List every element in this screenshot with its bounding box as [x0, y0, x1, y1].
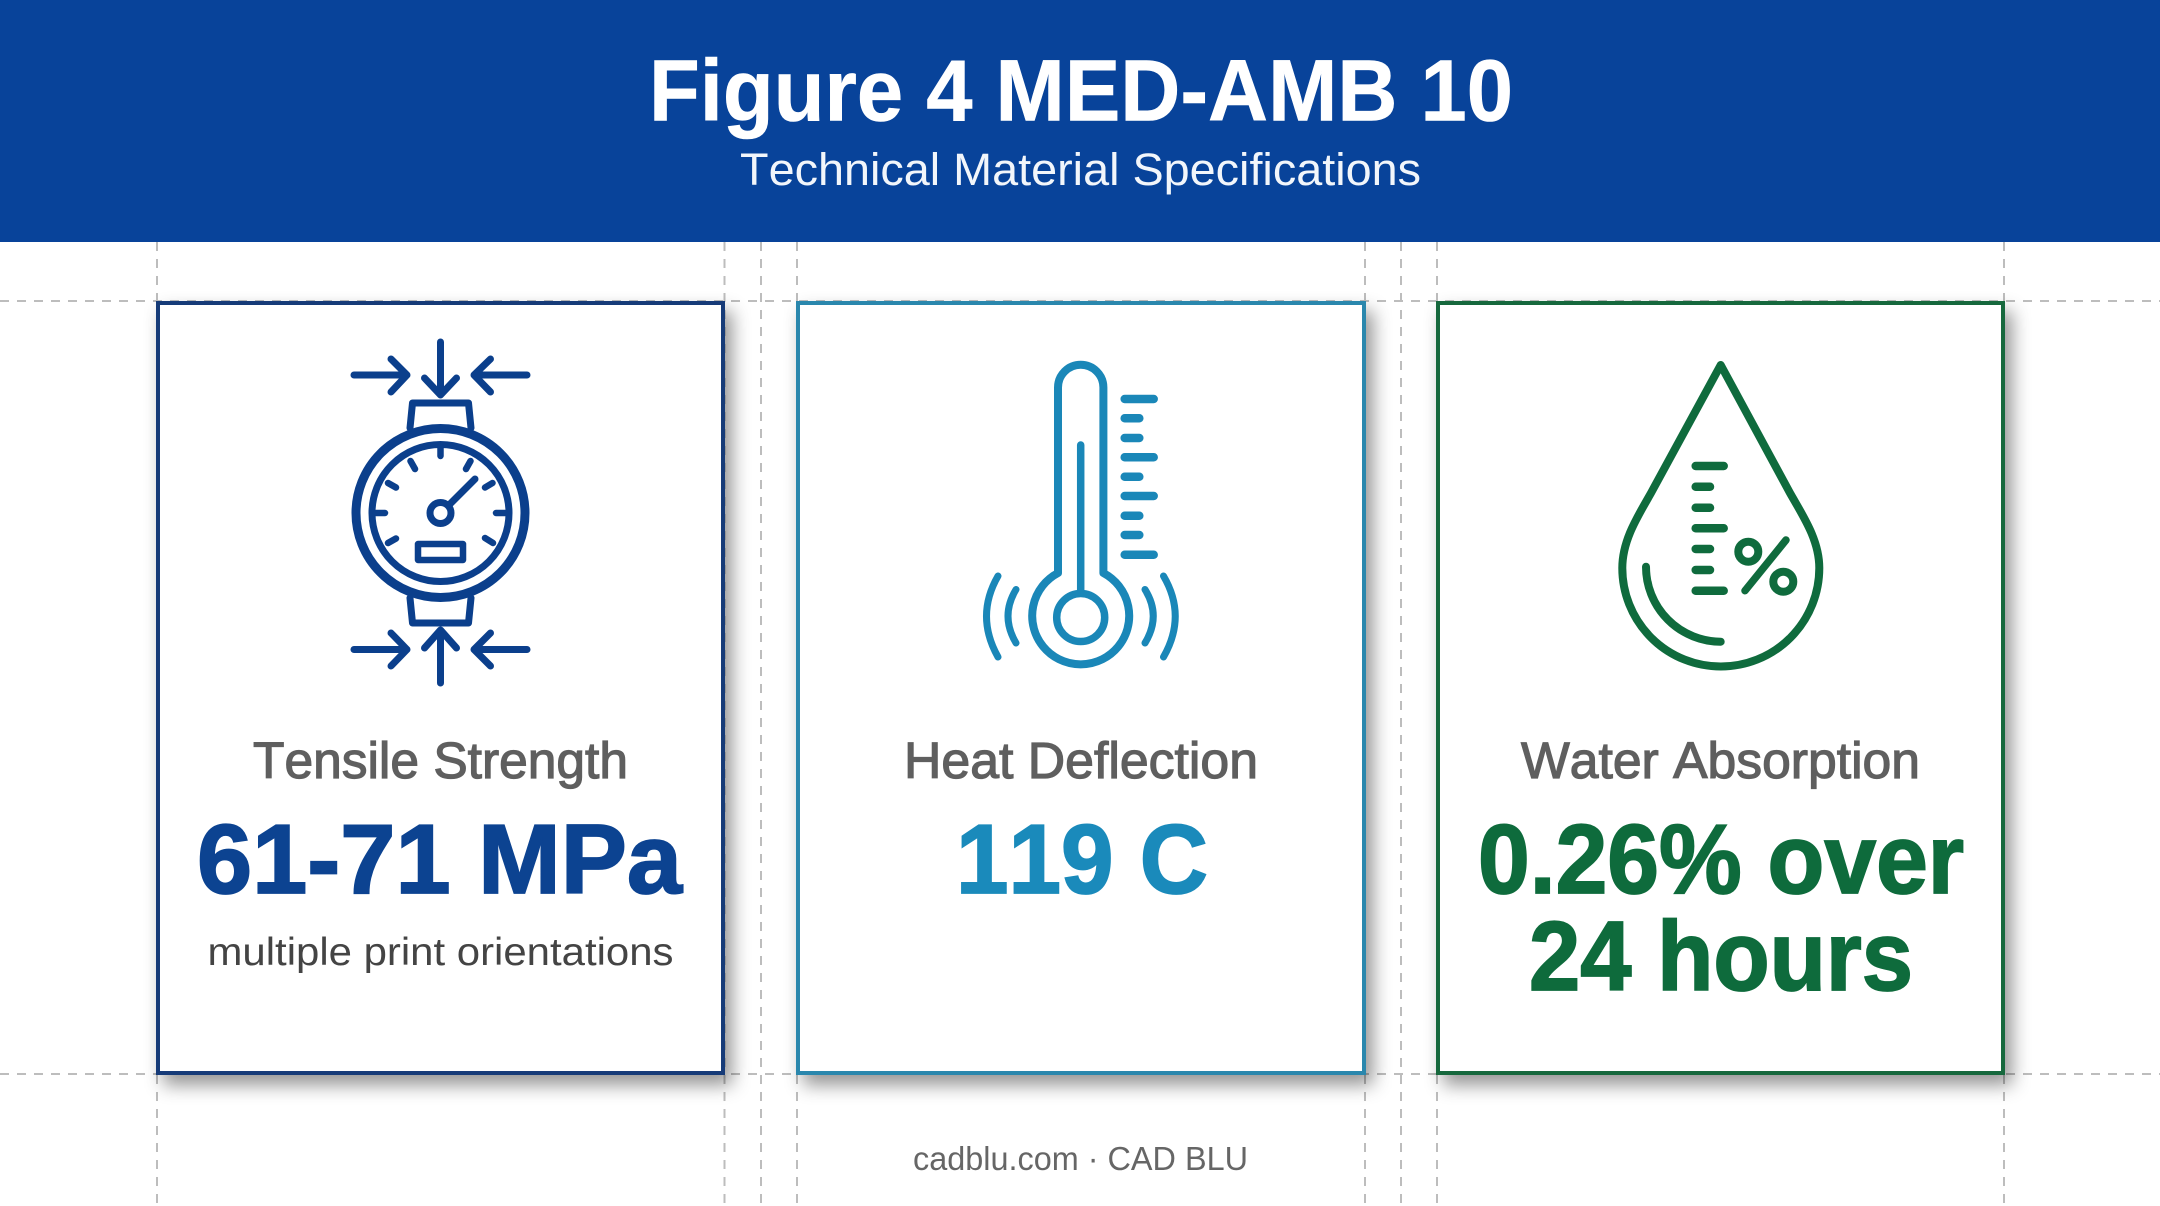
panel: water absorption: [1438, 303, 2003, 1073]
footer credit: cadblu.com · CAD BLU: [913, 1140, 1248, 1177]
metric label: Water Absorption: [1521, 732, 1920, 789]
metric value: 61-71 MPa: [197, 804, 684, 914]
header banner: [0, 0, 2160, 242]
icon: thermometer: [986, 365, 1175, 664]
title: Figure 4 MED-AMB 10: [649, 42, 1513, 140]
panel: heat deflection: [798, 303, 1364, 1073]
metric value: [1478, 804, 1964, 1011]
metric value: 24 hours: [1529, 901, 1913, 1011]
icon: pressure gauge with compression arrows: [354, 342, 527, 683]
metric note: multiple print orientations: [208, 931, 674, 974]
metric value: 119 C: [956, 804, 1208, 914]
subtitle: Technical Material Specifications: [740, 144, 1421, 195]
metric label: Heat Deflection: [904, 732, 1258, 789]
icon: water drop with percent: [1622, 365, 1819, 666]
metric label: Tensile Strength: [253, 732, 628, 789]
metric value: 0.26% over: [1478, 804, 1964, 914]
panel: tensile strength: [158, 303, 723, 1073]
